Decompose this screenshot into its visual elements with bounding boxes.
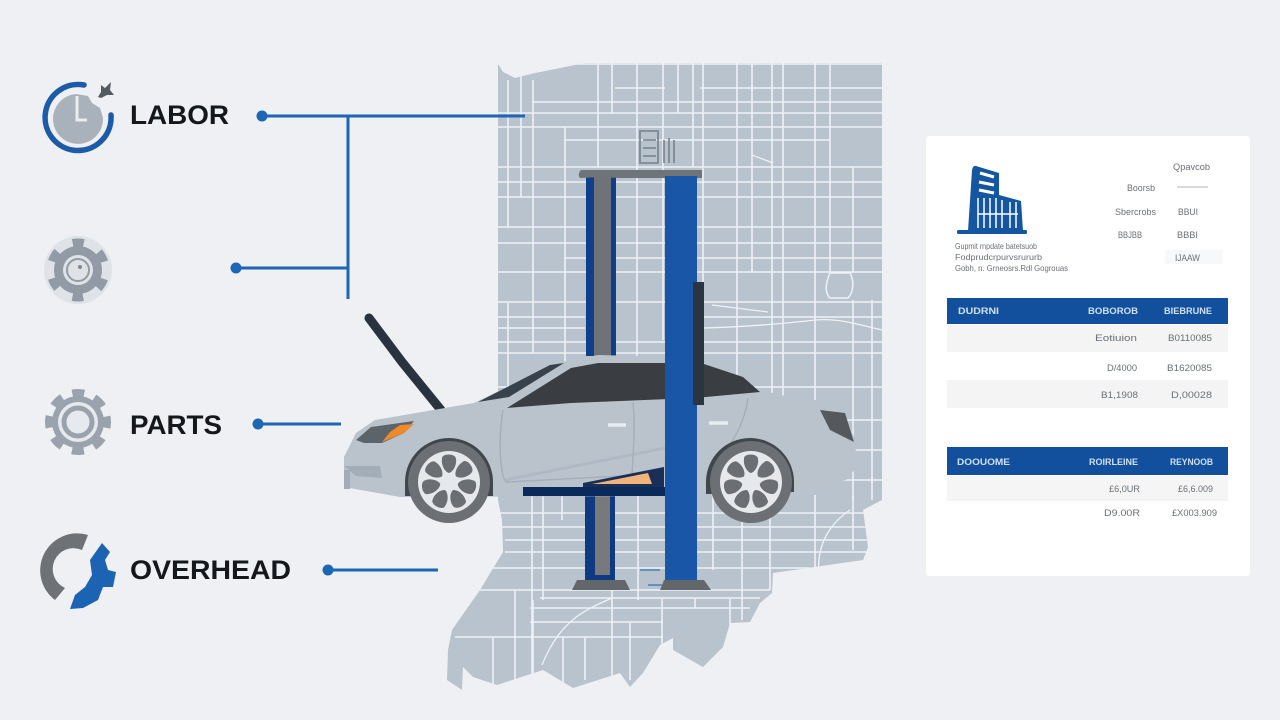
door handles	[608, 423, 728, 425]
connector: labor	[256, 110, 525, 299]
invoice meta	[1115, 162, 1223, 264]
table two: REYNOOB	[1170, 457, 1213, 468]
lift: rear post lower	[572, 495, 630, 590]
icon: labor clock	[45, 82, 114, 150]
lift: rear post upper	[586, 176, 616, 356]
icon: office building	[957, 166, 1027, 234]
invoice meta: BBJBB	[1118, 230, 1142, 241]
table two	[947, 447, 1228, 519]
invoice meta: BBUI	[1178, 207, 1198, 218]
lift: main post	[640, 176, 711, 590]
company address text: Gupmit rnpdate batetsuob	[955, 241, 1037, 251]
table one: D/4000	[1107, 363, 1137, 374]
company address text	[955, 241, 1068, 273]
front bumper vent	[344, 466, 382, 489]
small building glyph on map	[640, 131, 674, 163]
invoice meta: BBBI	[1177, 230, 1198, 241]
headlight	[356, 421, 414, 443]
table one: BIEBRUNE	[1164, 306, 1212, 317]
icon: gauge gear	[44, 236, 112, 304]
body	[344, 355, 857, 497]
panel: estimate card	[926, 136, 1250, 576]
connector: second item	[230, 262, 348, 274]
lift: top crossbar	[579, 170, 702, 178]
table two: £X003.909	[1172, 508, 1217, 519]
wheel arches	[405, 438, 493, 496]
table two: DOOUOME	[957, 457, 1010, 468]
icon: parts gear	[50, 394, 106, 450]
connector: parts	[252, 418, 341, 430]
icon: overhead split gear	[40, 533, 116, 609]
label: overhead: OVERHEAD	[130, 555, 291, 585]
company address text: Gobh, n. Grneosrs.Rdl Gogrouas	[955, 263, 1068, 273]
table one: B1620085	[1167, 363, 1212, 374]
rear wheel	[710, 441, 792, 523]
table two: D9.00R	[1104, 508, 1140, 519]
lift: arm and wedge	[523, 467, 665, 496]
invoice meta: Boorsb	[1127, 183, 1155, 194]
street map silhouette	[447, 63, 882, 690]
table one	[947, 298, 1228, 408]
company address text: Fodprudcrpurvsrururb	[955, 252, 1042, 262]
taillight	[820, 410, 854, 442]
door lines	[500, 398, 748, 482]
table two: ROIRLEINE	[1089, 457, 1138, 468]
connector: overhead	[322, 564, 438, 576]
label: parts: PARTS	[130, 410, 222, 440]
table one: B1,1908	[1101, 390, 1138, 401]
windshield	[478, 363, 564, 402]
side window	[507, 363, 760, 408]
table one: DUDRNI	[958, 306, 999, 317]
table one: D,00028	[1171, 390, 1212, 401]
table one: Eotiuion	[1095, 333, 1137, 344]
table one: B0110085	[1168, 333, 1212, 344]
crease	[505, 445, 680, 480]
invoice meta: IJAAW	[1175, 253, 1200, 264]
table one: BOBOROB	[1088, 306, 1138, 317]
hood	[369, 318, 441, 410]
label: labor: LABOR	[130, 100, 229, 130]
invoice meta: Sbercrobs	[1115, 207, 1156, 218]
table two: £6,6.009	[1178, 484, 1213, 495]
table two: £6,0UR	[1109, 484, 1140, 495]
invoice meta: Qpavcob	[1173, 162, 1210, 173]
car	[344, 318, 857, 523]
front wheel	[408, 441, 490, 523]
